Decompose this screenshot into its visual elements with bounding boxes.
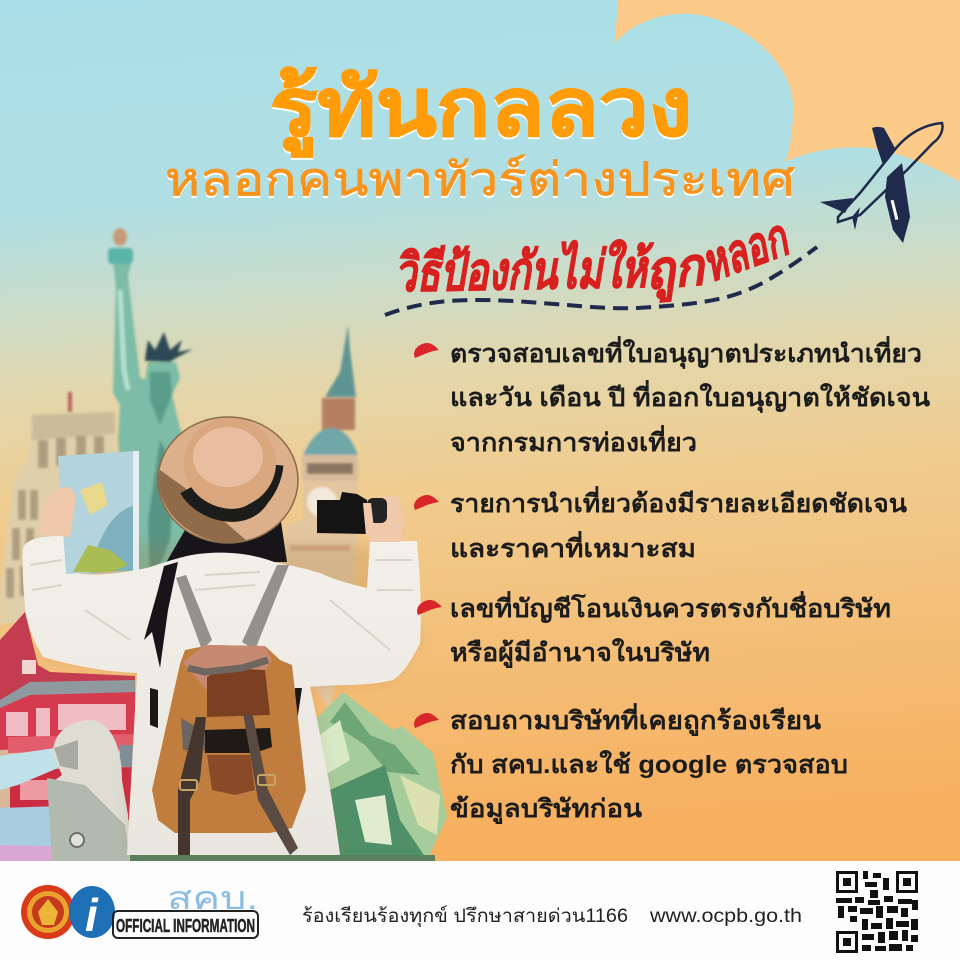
tip 4: กับ สคบ.และใช้ google ตรวจสอบ [450, 749, 848, 779]
logo: government seal [21, 885, 75, 939]
backpack top flap [183, 645, 272, 700]
left hand [40, 487, 75, 537]
QR code [836, 871, 918, 953]
title line 1: รู้ทันกลลวง [270, 63, 692, 158]
tip 1: ตรวจสอบเลขที่ใบอนุญาตประเภทนำเที่ยว [450, 336, 922, 370]
logo: official information: สคบ. [167, 880, 258, 916]
backpack side straps [150, 688, 302, 728]
peach cloud [615, 0, 960, 182]
neck hair [163, 515, 287, 568]
map book [58, 451, 139, 574]
website text: www.ocpb.go.th [649, 906, 802, 927]
monument: watercolor water and flowers [0, 748, 130, 861]
hotline text: ร้องเรียนร้องทุกข์ ปรึกษาสายด่วน1166 [302, 905, 628, 928]
traveler woman [23, 417, 421, 855]
ground strip [130, 855, 435, 861]
monument: red pagoda [0, 612, 143, 830]
tip 4: ข้อมูลบริษัทก่อน [450, 795, 642, 825]
tip 2 [414, 486, 907, 563]
monument: Statue of Liberty [108, 228, 193, 600]
backpack straps [176, 575, 212, 650]
hair strands [144, 562, 178, 668]
title line 2: หลอกคนพาทัวร์ต่างประเทศ [165, 153, 795, 205]
tip 2: รายการนำเที่ยวต้องมีรายละเอียดชัดเจน [450, 486, 907, 518]
logo: info i: i [85, 889, 99, 941]
soft shadow behind woman [25, 545, 420, 855]
monument: Big Ben [285, 325, 358, 710]
subheading: หลอก [694, 209, 797, 293]
tip list [414, 336, 930, 825]
tip 2: และราคาที่เหมาะสม [450, 531, 696, 563]
backpack lower straps [178, 717, 206, 855]
logo: info i [69, 886, 115, 941]
logo: official information: OFFICIAL INFORMATION [116, 916, 255, 936]
tip 4: สอบถามบริษัทที่เคยถูกร้องเรียน [450, 703, 821, 737]
backpack body [152, 645, 306, 833]
icon: airplane [820, 123, 943, 243]
monument: Leaning Tower of Pisa [0, 392, 125, 625]
tip 1 [414, 336, 930, 457]
shirt creases [30, 560, 413, 650]
subheading: ถูก [643, 238, 709, 304]
subheading: วิธีป้องกันไม่ให้ [394, 238, 655, 303]
footer panel [0, 861, 960, 960]
dashed flight path [385, 247, 817, 315]
title [165, 63, 795, 207]
subheading [394, 209, 797, 304]
title line 2: หลอกคนพาทัวร์ต่างประเทศ [165, 155, 795, 207]
title line 1: รู้ทันกลลวง [270, 65, 692, 160]
tip 3 [417, 591, 891, 669]
camera [317, 492, 387, 534]
right hand [364, 495, 405, 542]
tip 3: เลขที่บัญชีโอนเงินควรตรงกับชื่อบริษัท [450, 591, 891, 623]
tip 1: จากกรมการท่องเที่ยว [450, 425, 697, 457]
monument: green mountain [315, 692, 447, 861]
tip 3: หรือผู้มีอำนาจในบริษัท [450, 637, 710, 669]
tip 1: และวัน เดือน ปี ที่ออกใบอนุญาตให้ชัดเจน [450, 380, 930, 414]
backpack pocket [203, 728, 272, 753]
hat [158, 417, 298, 543]
logo: official information [113, 880, 258, 938]
shirt [23, 536, 421, 855]
thumb on camera [363, 503, 375, 536]
monument: Merlion [47, 720, 130, 861]
tip 4 [414, 703, 848, 825]
